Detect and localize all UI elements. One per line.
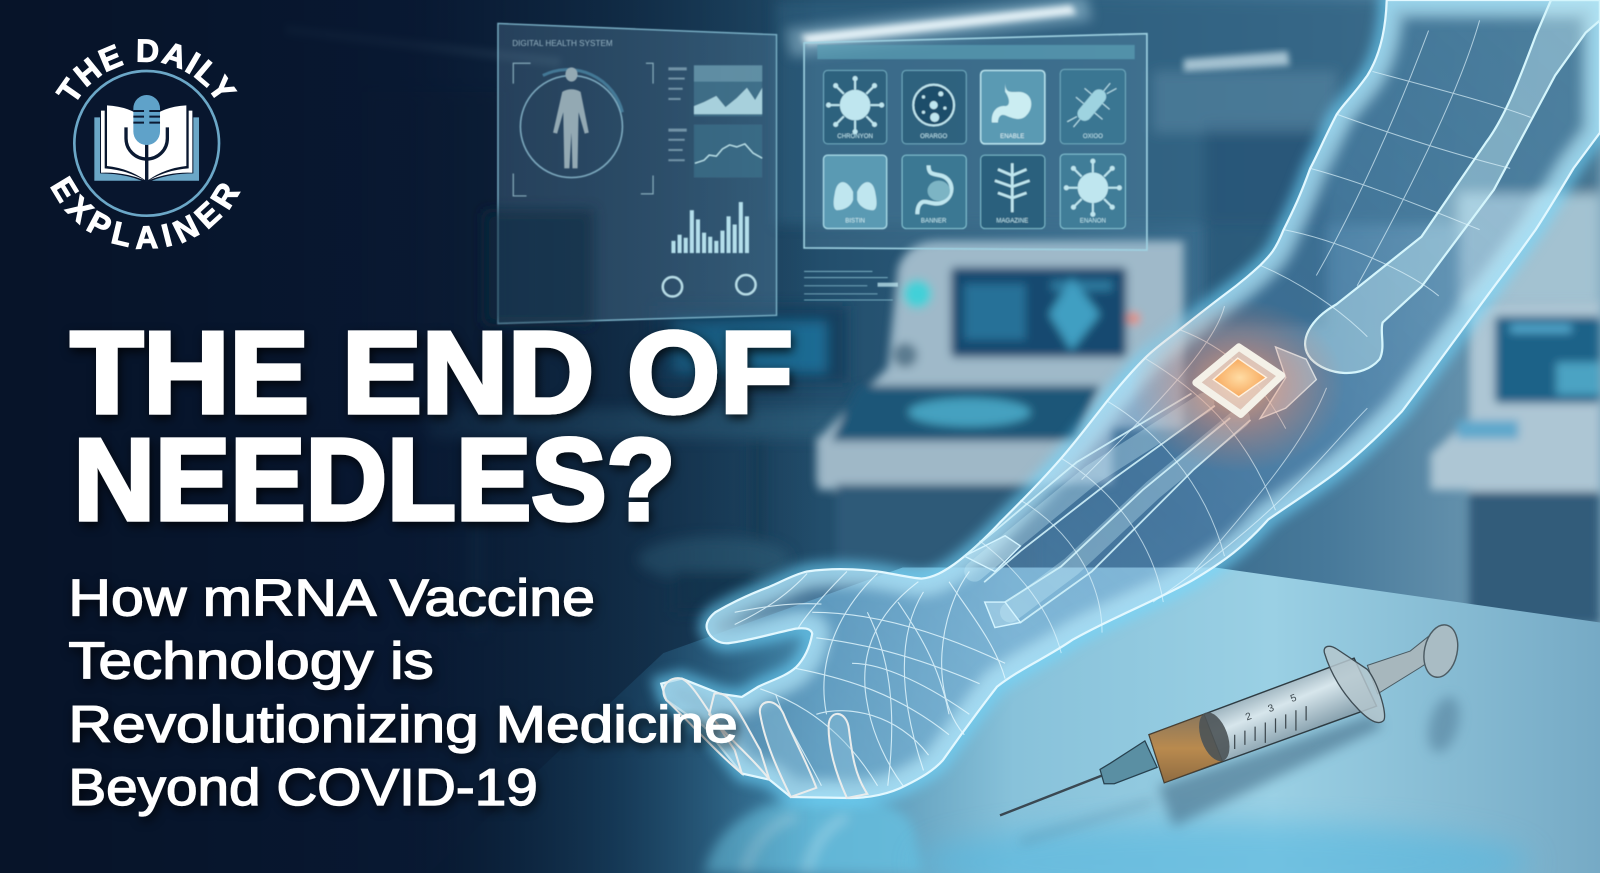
tile: branching tree [981, 155, 1045, 229]
table light pools [918, 821, 1531, 873]
panel title: DIGITAL HEALTH SYSTEM [512, 39, 613, 48]
logo: The Daily Explainer [50, 39, 241, 250]
title line 1: THE END OF [70, 307, 793, 437]
upper arm bone (humerus) [1305, 0, 1600, 373]
arm outer glow [661, 0, 1600, 798]
graduation marks: 3 [1267, 703, 1276, 715]
needle [1000, 776, 1102, 815]
flange [1324, 646, 1385, 723]
arm outline [661, 0, 1600, 798]
ceiling and wall blocks [367, 0, 1600, 633]
plunger rod [1367, 635, 1439, 694]
tile: bacterium: OXIOO [1083, 133, 1103, 140]
graduation marks [1235, 693, 1306, 749]
data readout strip [804, 271, 898, 300]
hand wireframe [735, 571, 1005, 786]
wireframe grid [980, 20, 1531, 653]
plunger disc [1419, 622, 1462, 680]
hub [1100, 741, 1157, 784]
ceiling lights [286, 0, 1290, 71]
fingers [663, 678, 867, 798]
hologram panel: disease icon grid [804, 34, 1147, 300]
tile: branching tree: MAGAZINE [996, 217, 1028, 224]
line chart [694, 124, 762, 178]
table surface [429, 567, 1600, 873]
logo arc text: EXPLAINER [50, 176, 241, 250]
arm body [661, 0, 1600, 798]
subtitle [68, 569, 738, 817]
rubber stopper [1193, 708, 1235, 765]
implant patch outer [1196, 347, 1282, 414]
hand reflection [704, 793, 923, 873]
tile: bacterium [1060, 69, 1126, 144]
syringe shadow [1020, 693, 1465, 842]
tile: petri dish: ORARGO [920, 133, 947, 140]
gauge circles [663, 275, 756, 296]
right lab console [1431, 301, 1600, 625]
tile: petri dish [902, 70, 966, 144]
body figure in scan ring [513, 63, 653, 196]
tile: coronavirus [1060, 154, 1126, 229]
title [70, 307, 793, 544]
tile: virus [823, 70, 887, 144]
syringe on table [1000, 622, 1465, 842]
central lab console [816, 241, 1184, 602]
subtitle line 3: Revolutionizing Medicine [68, 696, 738, 754]
subtitle line 1: How mRNA Vaccine [68, 569, 595, 627]
tile: lungs: BISTIN [845, 217, 865, 224]
implant patch core [1213, 358, 1266, 397]
area chart [694, 65, 762, 116]
forearm bones [964, 394, 1250, 622]
header bar [817, 45, 1135, 59]
tile: stomach outline: BANNER [921, 217, 947, 224]
bar chart [671, 202, 749, 253]
icon: open book [94, 105, 199, 181]
hologram panel: body scan and charts [482, 23, 777, 327]
glow around implant [1131, 299, 1345, 472]
tile: virus: CHRONYON [837, 133, 873, 140]
logo arc text [50, 39, 241, 250]
graduation marks: 5 [1289, 693, 1299, 705]
subtitle line 2: Technology is [68, 633, 434, 691]
wrist bones [964, 536, 1020, 628]
subtitle line 4: Beyond COVID-19 [68, 759, 538, 817]
tile: stomach outline [902, 155, 966, 229]
logo ring [74, 71, 219, 216]
tile: stomach bright: ENABLE [1000, 133, 1024, 140]
barrel [1149, 658, 1377, 783]
title line 2: NEEDLES? [73, 414, 676, 544]
tile: stomach bright [981, 70, 1045, 144]
arm inner rim light [661, 0, 1600, 798]
graduation marks: 2 [1244, 711, 1254, 723]
elbow joint cartilage [1260, 347, 1316, 418]
holographic arm [661, 0, 1600, 798]
left dark overlay [0, 0, 816, 873]
icon: microphone [126, 95, 167, 182]
tile: lungs [823, 155, 887, 229]
logo arc text: THE DAILY [55, 39, 238, 100]
tile: coronavirus: ENANON [1080, 217, 1106, 224]
amber liquid [1149, 714, 1222, 783]
side labels [668, 67, 687, 161]
lab shadow behind panel [482, 209, 594, 327]
